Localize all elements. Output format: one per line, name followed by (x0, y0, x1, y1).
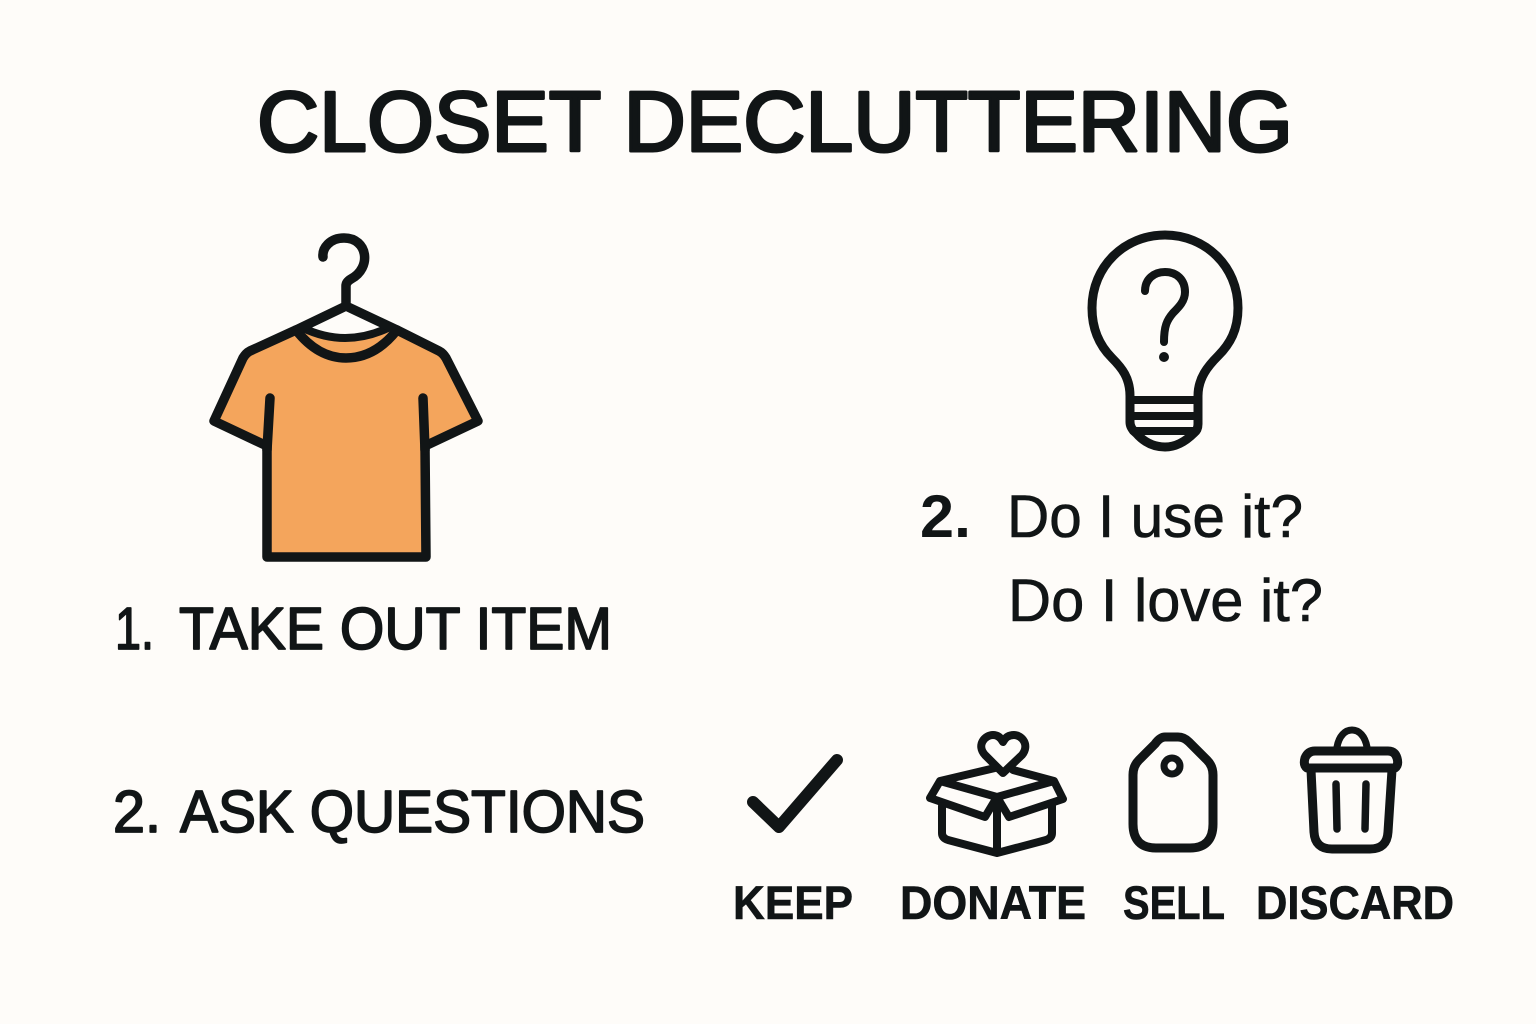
bulb base lines (1131, 400, 1198, 431)
tag hole (1164, 758, 1180, 774)
collar back (303, 328, 388, 338)
body (1311, 770, 1392, 849)
tag outline (1133, 737, 1213, 848)
question line two: Do I love it? (1008, 567, 1323, 634)
t-shirt outline (214, 330, 478, 557)
handle (1337, 730, 1367, 747)
label: keep: KEEP (733, 876, 853, 929)
step 2 questions (920, 483, 1323, 634)
heart (981, 735, 1025, 773)
t-shirt orange fill (214, 330, 478, 557)
bars (1336, 784, 1366, 829)
text: ASK QUESTIONS (180, 779, 645, 845)
label: donate: DONATE (900, 876, 1086, 929)
bulb outline (1092, 235, 1238, 447)
label: sell: SELL (1123, 876, 1225, 929)
question dot (1159, 352, 1169, 362)
number: 2. (920, 483, 971, 550)
icon: check mark (753, 760, 837, 827)
text: TAKE OUT ITEM (179, 596, 612, 662)
icon: t-shirt on hanger (214, 238, 478, 557)
lid (1304, 751, 1398, 768)
question line one: Do I use it? (1007, 483, 1303, 550)
sleeve seams (267, 398, 425, 450)
label: discard: DISCARD (1256, 876, 1454, 929)
icon: trash can (1304, 730, 1398, 849)
hanger (296, 238, 397, 330)
box body (942, 798, 1052, 853)
question mark (1145, 272, 1185, 342)
number: 2. (113, 779, 161, 845)
icon: light bulb with question mark (1092, 235, 1238, 447)
title: CLOSET DECLUTTERING (257, 75, 1293, 170)
step 1 label (115, 596, 612, 662)
icon: price tag (1133, 737, 1213, 848)
box flaps (930, 768, 1063, 817)
number: 1. (115, 596, 154, 662)
step 2 ask questions label (113, 779, 645, 845)
icon: donation box with heart (930, 735, 1063, 853)
